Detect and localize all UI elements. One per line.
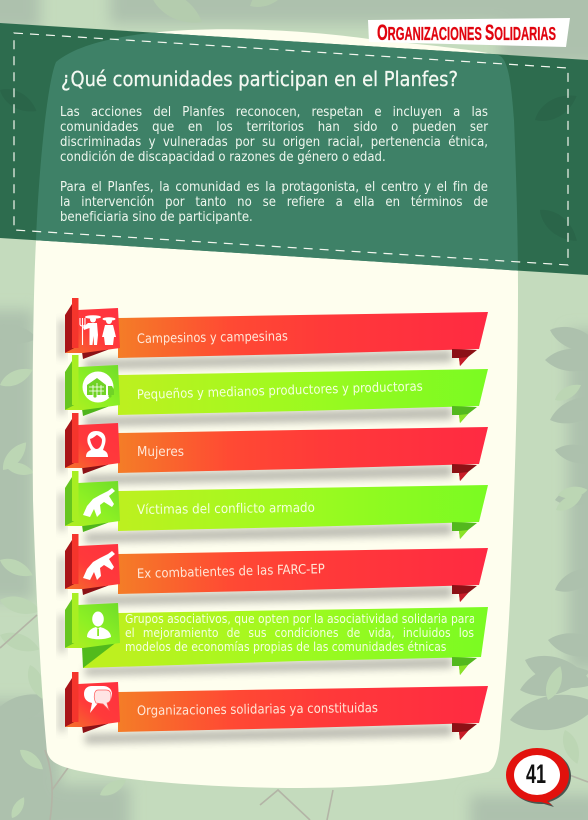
ribbon 4: victimas: Víctimas del conflicto armado [137,501,315,518]
intro text: discriminadas y vulneradas por su origen racial, pertenencia étnica, [60,135,488,150]
cream page panel [33,29,518,788]
green heading band [0,23,588,290]
ribbon 2: productores [58,355,488,427]
icon: woman [86,431,108,457]
icon: farmers [80,315,116,345]
page number badge [506,748,571,807]
icon: rifle [83,551,115,580]
icon: truck in circle [82,372,114,402]
ribbon 4: victimas [58,471,488,543]
ribbon 3: mujeres [58,413,488,485]
page number badge: 41 [526,759,546,789]
group text: Grupos asociativos, que opten por la asociatividad solidaria para [125,612,474,626]
ribbon 5: ex combatientes: Ex combatientes de las FARC-EP [137,562,325,582]
icon: rifle [83,488,115,517]
ribbon 1: campesinos: Campesinos y campesinas [137,329,288,347]
intro text: la intervención por tanto no se refiere a ella en términos de [60,195,488,210]
intro text [60,105,488,225]
group text [125,612,474,658]
intro text: condición de discapacidad o razones de género o edad. [60,150,386,165]
icon: person with tie [87,612,111,639]
section tab: ORGANIZACIONES SOLIDARIAS [377,20,556,45]
ribbon 3: mujeres: Mujeres [137,445,184,460]
light foliage [0,364,588,820]
intro text: Las acciones del Planfes reconocen, respetan e incluyen a las [60,105,488,120]
ribbon 7: organizaciones [58,672,488,744]
dashed frame [14,33,568,265]
ribbon 7: organizaciones: Organizaciones solidarias ya constituidas [137,701,378,719]
ribbon 1: campesinos [58,298,488,370]
intro text: beneficiaria sino de participante. [60,210,253,225]
group text: el mejoramiento de sus condiciones de vida, incluidos los [125,626,474,640]
ribbon 2: productores: Pequeños y medianos productores y productoras [137,380,423,403]
intro text: Para el Planfes, la comunidad es la protagonista, el centro y el fin de [60,180,488,195]
group text: modelos de economías propias de las comunidades étnicas [125,640,446,654]
heading: ¿Qué comunidades participan en el Planfes? [61,67,458,91]
icon: speech bubbles [84,686,112,713]
ribbon 6: grupos asociativos [58,593,488,676]
ribbon 5: ex combatientes [58,534,488,606]
intro text: comunidades que en los territorios han sido o pueden ser [60,120,488,135]
